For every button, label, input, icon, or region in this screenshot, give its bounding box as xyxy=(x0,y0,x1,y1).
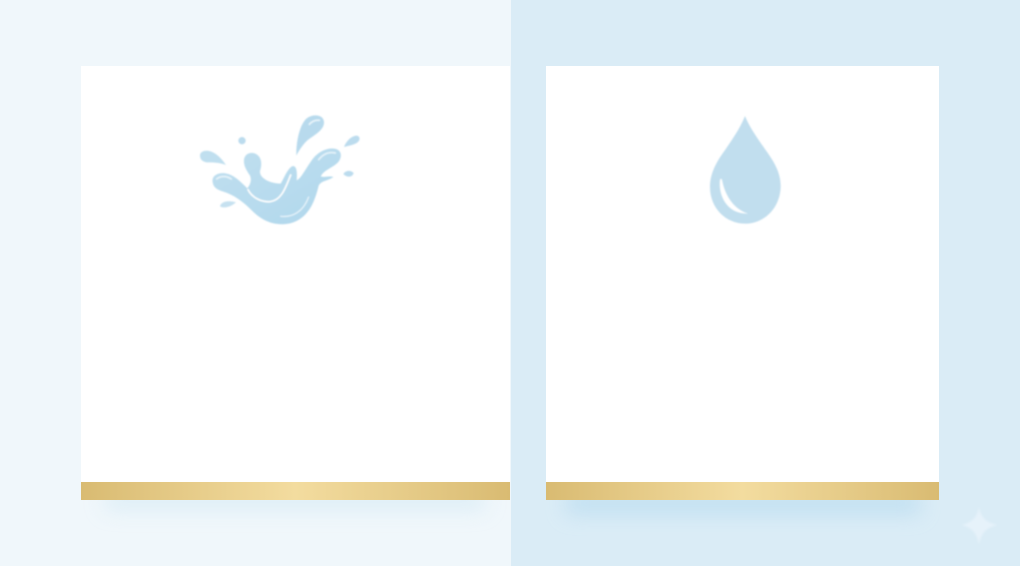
card body: right xyxy=(546,66,939,482)
droplet: right small xyxy=(343,171,354,177)
card shadow: right xyxy=(566,492,920,514)
droplet: small round xyxy=(238,137,246,144)
gold bar: left xyxy=(81,482,510,500)
droplet highlight: top tall xyxy=(309,120,319,124)
droplet: upper left xyxy=(200,151,226,165)
icon: water drop xyxy=(710,116,781,224)
card shadow: left xyxy=(105,490,485,510)
panel: left card xyxy=(81,66,510,510)
panel: right card xyxy=(546,66,939,514)
highlight: splash left lobe xyxy=(217,176,231,179)
highlight: splash crease xyxy=(248,175,291,202)
droplet: upper right xyxy=(344,136,360,147)
droplet: lower left xyxy=(220,201,236,207)
highlight: drop glint xyxy=(720,179,748,214)
icon: water splash xyxy=(200,115,360,224)
icon: sparkle xyxy=(962,507,997,544)
highlight: splash lower right xyxy=(281,197,309,217)
droplet: top tall xyxy=(296,115,324,156)
card body: left xyxy=(81,66,510,482)
panel: left background xyxy=(0,0,511,566)
panel: right background xyxy=(511,0,1020,566)
highlight: splash right lobe xyxy=(319,153,335,160)
gold bar: right xyxy=(546,482,939,500)
